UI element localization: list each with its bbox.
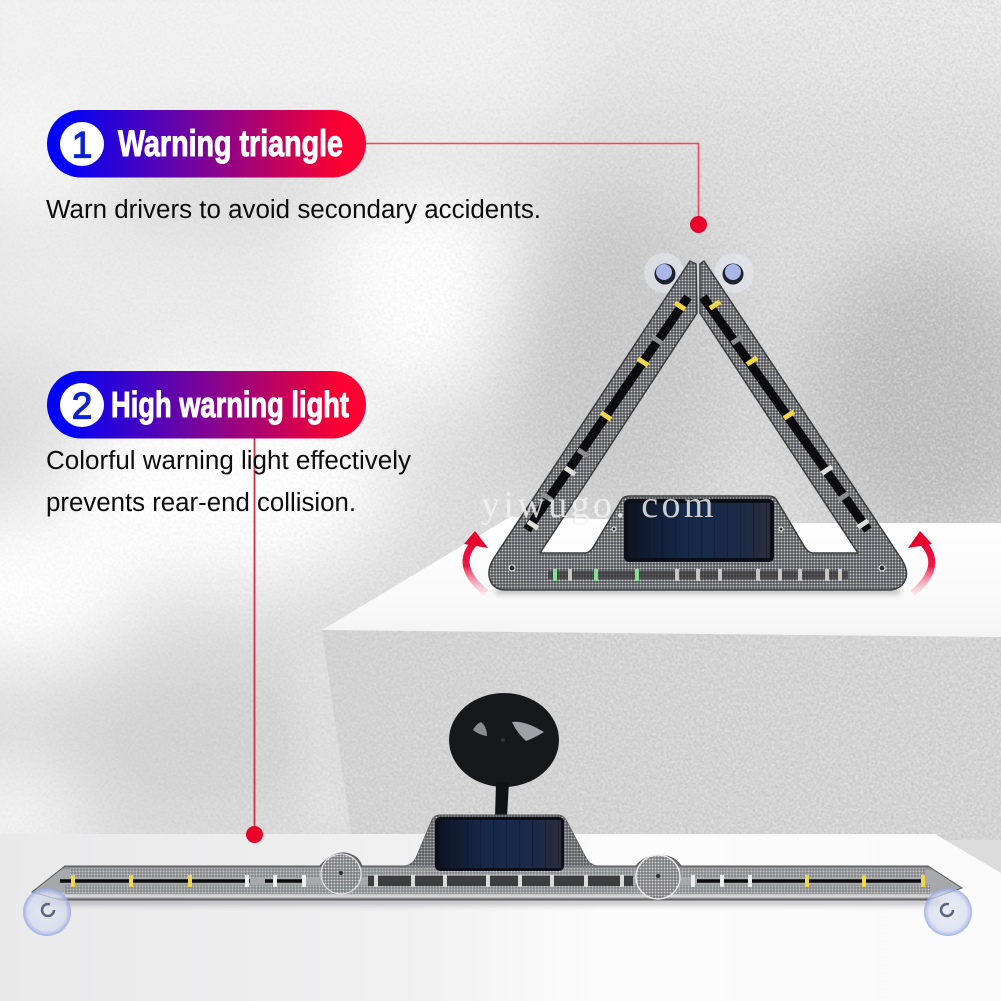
bottom floor surface	[0, 834, 1001, 1001]
suction cups at apex	[644, 253, 754, 293]
hinge disc left	[321, 854, 361, 894]
stretched light bar product	[23, 693, 972, 936]
hinge disc right	[636, 855, 680, 899]
pill 1	[47, 110, 366, 178]
pill 2	[47, 371, 366, 438]
bar dot texture	[65, 868, 930, 894]
connector line 1	[366, 144, 698, 224]
suction cup left	[23, 888, 71, 936]
suction cup right	[924, 888, 972, 936]
left light channel	[60, 879, 305, 883]
number badge 2: 2	[72, 386, 92, 426]
right light channel	[697, 879, 925, 883]
description 1: Warn drivers to avoid secondary accidents.	[46, 196, 541, 224]
connector line 2	[254, 438, 256, 834]
bar body	[32, 815, 962, 900]
left arm light channel	[527, 297, 688, 530]
bar LEDs	[73, 875, 923, 887]
upper shelf surface	[322, 517, 1001, 637]
lower block front	[322, 630, 1001, 840]
hinge screws	[339, 871, 660, 878]
base LED row	[548, 569, 848, 581]
mount disc	[449, 693, 559, 817]
description 2: prevents rear-end collision.	[46, 489, 356, 517]
heading 1: Warning triangle	[118, 123, 343, 164]
left arm LEDs	[528, 303, 685, 528]
shadow under light bar	[40, 899, 940, 905]
rotation arrow left	[464, 531, 488, 593]
watermark: yiwugo. com	[481, 484, 717, 526]
rotation arrow right	[908, 531, 932, 593]
connector dot 2	[246, 826, 263, 843]
right arm light channel	[703, 297, 868, 530]
number badge 2	[60, 383, 104, 427]
callout 1: warning triangle	[46, 110, 541, 224]
lighter corner	[295, 634, 350, 834]
description 2	[46, 447, 411, 517]
description 2: Colorful warning light effectively	[46, 447, 411, 475]
bar solar panel	[435, 817, 564, 871]
right arm LEDs	[710, 302, 868, 527]
centre LED row	[368, 875, 633, 887]
folded triangle product	[464, 253, 932, 593]
number badge 1: 1	[72, 124, 92, 166]
callout 2: high warning light	[46, 371, 411, 517]
heading 2: High warning light	[111, 384, 349, 425]
connector dot 1	[690, 216, 707, 233]
bar centre dot texture	[405, 815, 597, 866]
number badge 1	[60, 122, 104, 166]
triangle body	[489, 261, 906, 590]
solar panel	[624, 499, 774, 562]
corner screws	[509, 527, 885, 571]
shadow under triangle	[496, 588, 900, 594]
